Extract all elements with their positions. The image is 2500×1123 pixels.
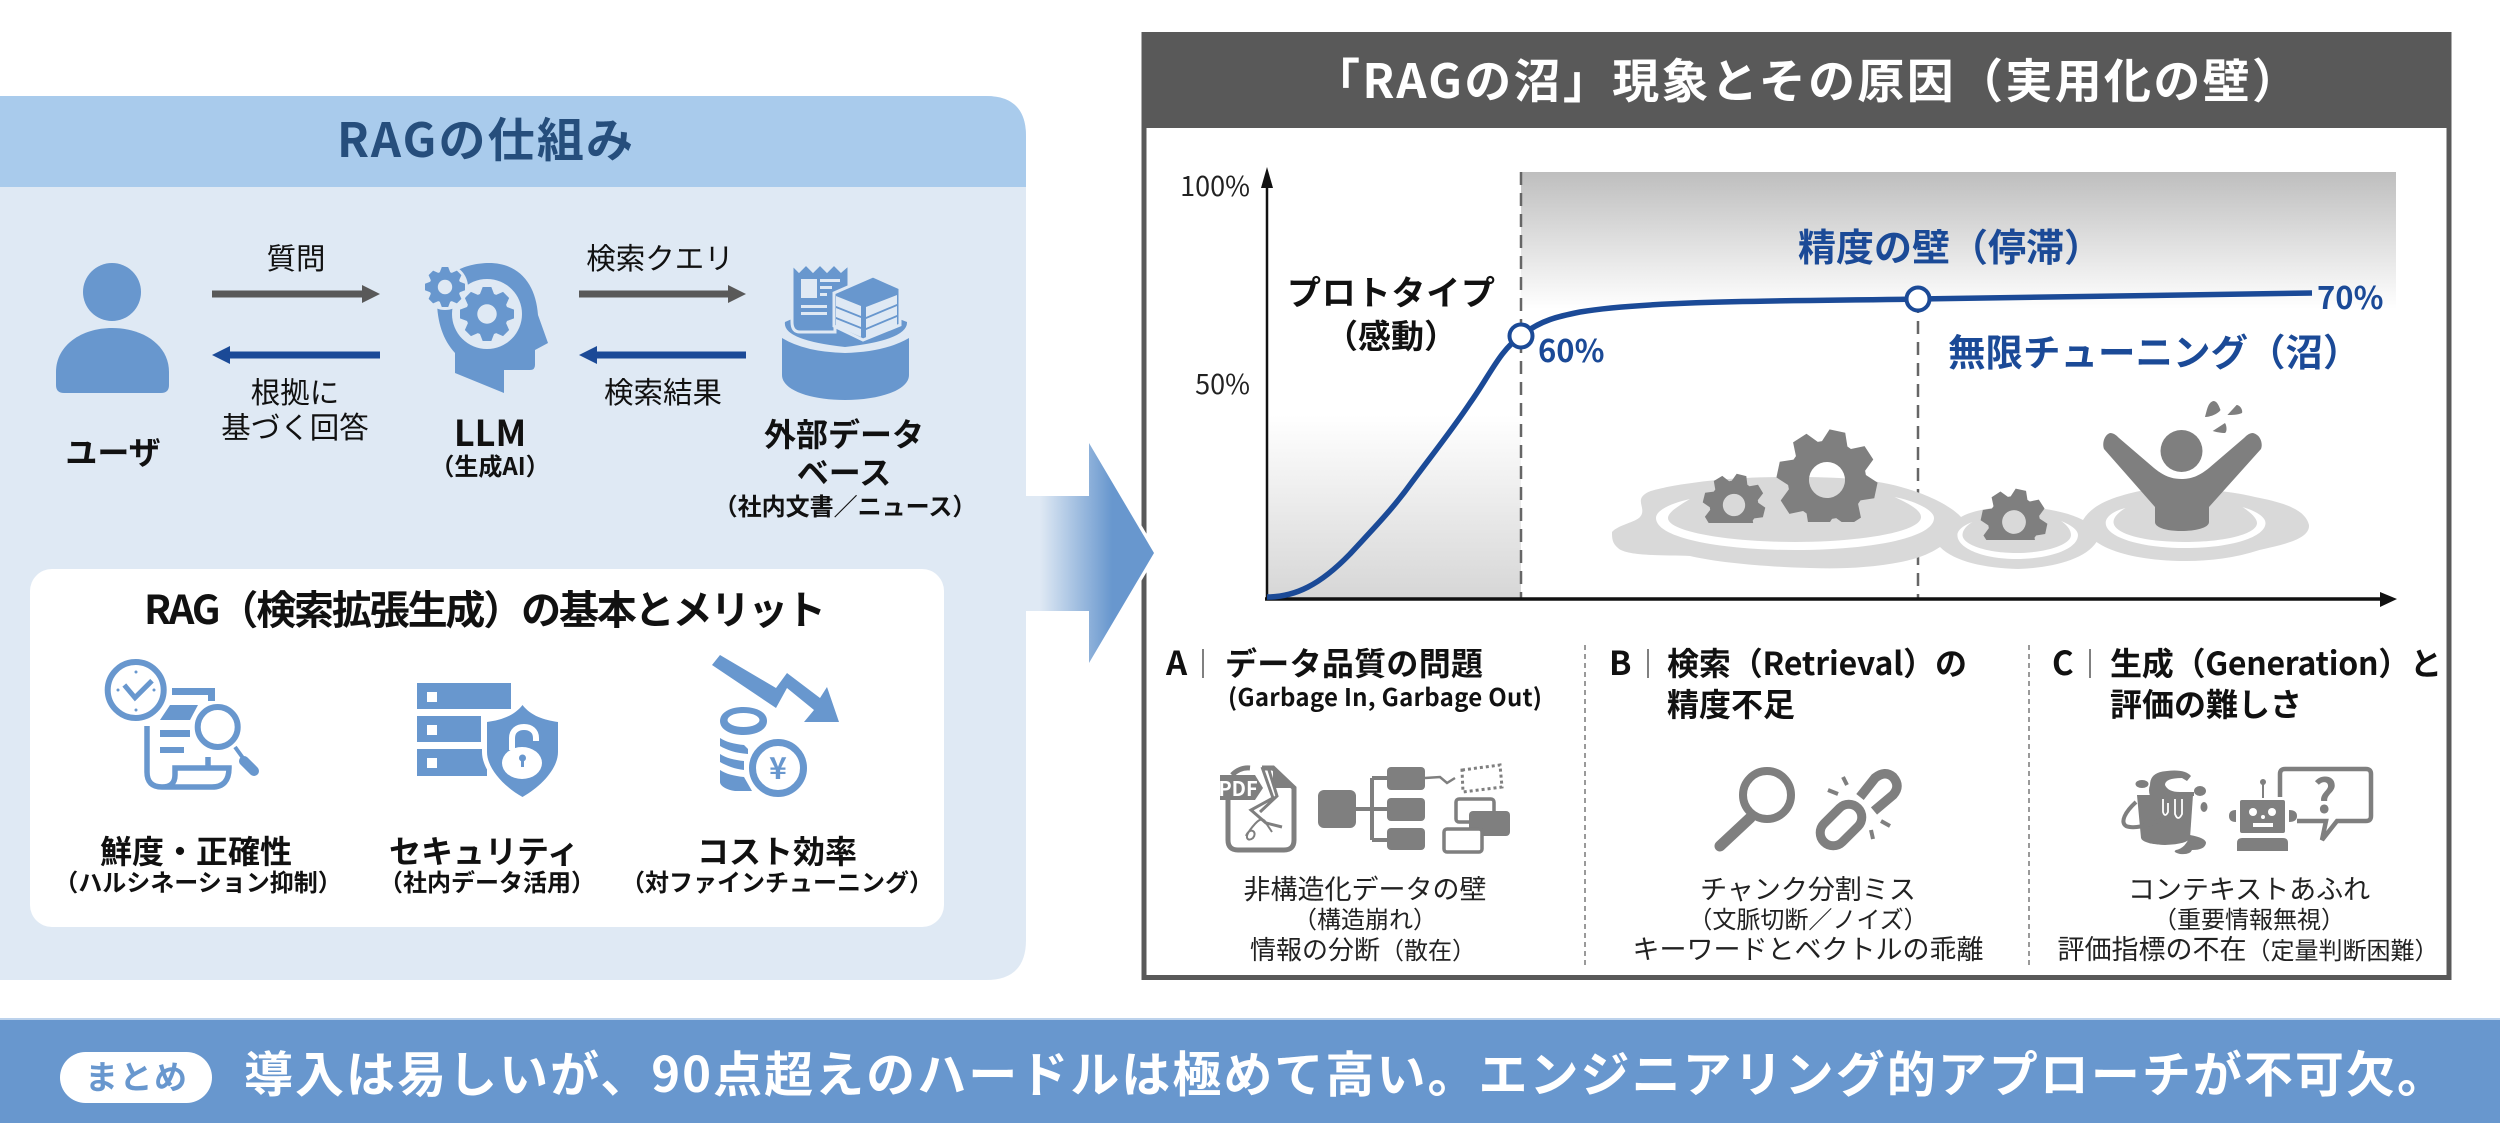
icon: broken structure tree (1318, 765, 1510, 852)
axis labels: 100% (1180, 165, 1250, 204)
label: 70%: 70% (2317, 273, 2383, 318)
icon: LLM head with gears (422, 263, 548, 393)
icon: speech bubble with question mark: ? (2313, 758, 2337, 827)
label: 社内データ活用: （社内データ活用） (379, 863, 595, 898)
label: 質問: 質問 (266, 236, 326, 278)
marker: 60% (1510, 324, 1532, 348)
axes (1261, 167, 2397, 607)
icon: magnifier (1720, 771, 1791, 846)
panel: RAGの仕組み (0, 96, 1026, 980)
label: 社内文書／ニュース: （社内文書／ニュース） (714, 487, 976, 522)
label: 外部データベース: ベース (797, 448, 891, 494)
axis labels: 50% (1195, 363, 1250, 402)
column dividers (1585, 645, 2029, 965)
text: A details: 非構造化データの壁 (1244, 868, 1486, 907)
panel header band (1142, 32, 2452, 128)
panel header band (0, 96, 1026, 187)
icon: large gear (1776, 429, 1878, 522)
panel: RAG basics and merits (30, 569, 944, 927)
summary band (0, 1018, 2500, 1123)
pill: まとめ: まとめ (85, 1051, 187, 1099)
text: C details: コンテキストあふれ (2128, 868, 2370, 907)
text: C details: 評価指標の不在（定量判断困難） (2058, 928, 2438, 967)
summary text: 導入は易しいが、90点超えのハードルは極めて高い。エンジニアリング的アプローチが不可欠。 (244, 1036, 2446, 1107)
heading A: (Garbage In, Garbage Out) (1228, 678, 1542, 713)
label: 根拠に基づく回答: 根拠に (251, 370, 339, 412)
label: セキュリティ: セキュリティ (389, 827, 579, 873)
label: 外部データベース: 外部データ (764, 410, 924, 456)
icon: cost down arrow and coins (712, 655, 839, 800)
arrow: search query (579, 285, 746, 303)
label: 検索クエリ: 検索クエリ (586, 236, 734, 278)
label: 生成AI: （生成AI） (430, 447, 550, 482)
text: A details: （構造崩れ） (1293, 900, 1437, 935)
axis labels (1180, 165, 1250, 402)
text: C details: （重要情報無視） (2153, 900, 2345, 935)
text: B details: （文脈切断／ノイズ） (1688, 900, 1928, 935)
icon: servers and shield lock (417, 683, 564, 803)
label: プロトタイプ（感動）: プロトタイプ (1287, 266, 1495, 315)
text: C details (2058, 868, 2438, 967)
heading B: 精度不足 (1667, 680, 1795, 726)
heading A: データ品質の問題 (1225, 639, 1483, 685)
column C: generation (2052, 637, 2442, 967)
label: yen sign: ¥ (769, 744, 787, 788)
arrow: search result (579, 346, 746, 364)
pill: まとめ (60, 1051, 212, 1103)
text: A details: 情報の分断（散在） (1250, 930, 1476, 967)
icon: person sinking (2103, 401, 2262, 531)
heading C: 生成（Generation）と (2110, 639, 2442, 685)
icon: overflowing bucket (2123, 771, 2208, 854)
heading B (1609, 637, 1967, 726)
panel: RAGの沼 (1142, 32, 2452, 978)
label: 対ファインチューニング: （対ファインチューニング） (621, 863, 933, 898)
label: コスト効率: コスト効率 (697, 827, 857, 873)
column B: retrieval (1609, 637, 1984, 967)
label: プロトタイプ（感動）: （感動） (1325, 310, 1457, 358)
label: 外部データベース (764, 410, 924, 494)
label: プロトタイプ（感動） (1287, 266, 1495, 358)
heading B: 検索（Retrieval）の (1667, 639, 1967, 685)
icon: external database (782, 264, 909, 400)
label: ユーザ: ユーザ (65, 428, 161, 474)
heading: RAG（検索拡張生成）の基本とメリット: RAG（検索拡張生成）の基本とメリット (144, 578, 826, 636)
icon: broken chain (1815, 774, 1897, 851)
heading C: C (2052, 637, 2074, 685)
icon: speech bubble with question mark (2280, 758, 2371, 840)
text: A details (1244, 868, 1486, 967)
label: 根拠に基づく回答: 基づく回答 (221, 405, 369, 447)
label: PDF tag: PDF (1218, 773, 1258, 802)
label: 精度の壁（停滞）: 精度の壁（停滞） (1798, 217, 2102, 272)
column A: data quality (1165, 637, 1542, 967)
arrow: question (212, 285, 380, 303)
text: B details (1632, 868, 1984, 967)
label: LLM: LLM (454, 405, 526, 457)
arrow: grounded answer (212, 346, 380, 364)
illustration: swamp puddles (1612, 401, 2309, 569)
text: B details: キーワードとベクトルの乖離 (1632, 928, 1984, 967)
text: B details: チャンク分割ミス (1700, 868, 1916, 907)
heading C (2052, 637, 2442, 726)
label: 根拠に基づく回答 (221, 370, 369, 447)
heading C: 評価の難しさ (2110, 680, 2302, 726)
label: ハルシネーション抑制: （ハルシネーション抑制） (54, 863, 342, 898)
icon: document clock magnifier (108, 662, 254, 787)
label: 無限チューニング（沼）: 無限チューニング（沼） (1948, 322, 2360, 377)
icon: user (56, 263, 169, 393)
line: precision curve (1267, 293, 2312, 597)
heading A (1165, 637, 1542, 713)
label: 検索結果: 検索結果 (604, 370, 722, 412)
heading: RAGの仕組み: RAGの仕組み (337, 102, 633, 171)
heading: 「RAGの沼」現象とその原因（実用化の壁）: 「RAGの沼」現象とその原因（実用化の壁） (1313, 43, 2299, 112)
icon: broken PDF (1218, 767, 1294, 850)
heading A: A (1165, 637, 1188, 685)
icon: robot (2229, 779, 2297, 851)
chart: precision curve (1180, 165, 2397, 607)
marker: 70% stall point (1906, 288, 1930, 310)
arrow: big arrow between panels (1026, 443, 1154, 663)
heading B: B (1609, 637, 1631, 685)
label: 鮮度・正確性: 鮮度・正確性 (100, 827, 292, 873)
icon: middle gear (1980, 488, 2048, 540)
icon: small gear (1702, 474, 1766, 523)
label: 60%: 60% (1538, 326, 1604, 371)
